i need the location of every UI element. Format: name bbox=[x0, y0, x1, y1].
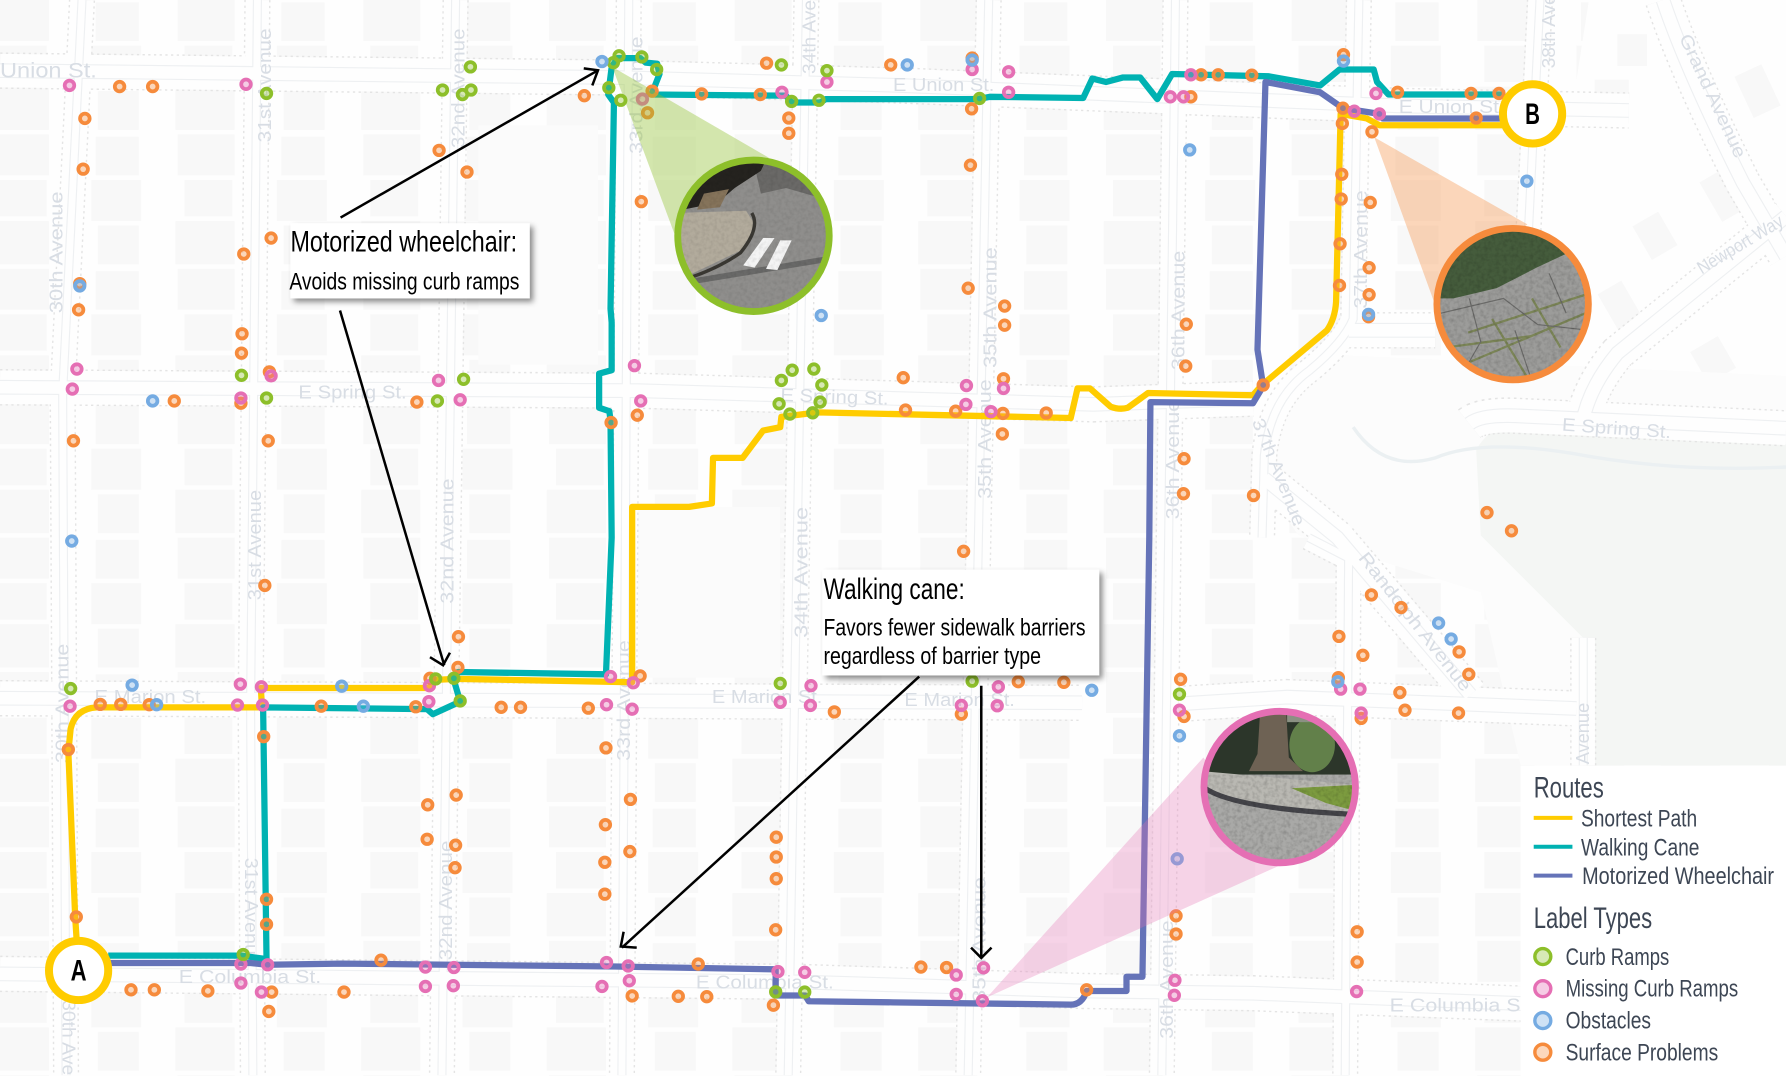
street labels: 34th Ave bbox=[800, 0, 820, 74]
street labels: 32nd Avenue bbox=[437, 478, 457, 604]
callout cone: missing curb ramp photo bbox=[987, 757, 1280, 997]
street labels: E Columbia St. bbox=[179, 967, 321, 987]
callout cone: surface problem photo bbox=[1374, 137, 1527, 302]
callout: walking cane bbox=[822, 570, 1099, 675]
route: motorized wheelchair bbox=[108, 82, 1502, 1005]
arrow: to curb-ramp detour bbox=[341, 68, 598, 218]
street labels: E Columbia S bbox=[1390, 995, 1521, 1015]
end marker B: B bbox=[1525, 98, 1540, 131]
route: walking cane bbox=[108, 58, 1502, 959]
street labels: E Spring St. bbox=[1561, 415, 1672, 442]
street labels: Randolph Avenue bbox=[1355, 548, 1476, 695]
street labels: E Spring St. bbox=[780, 385, 889, 409]
street labels: Grand Avenue bbox=[1675, 31, 1750, 161]
arrow: walking cane to 35th bbox=[971, 686, 992, 958]
legend item: curb ramps bbox=[1535, 944, 1669, 971]
street labels: E Marion St. bbox=[712, 687, 822, 707]
markers: surface problems bbox=[64, 50, 1516, 1016]
street labels: 32nd Avenue bbox=[449, 28, 469, 148]
markers: missing curb ramps bbox=[65, 65, 1384, 1006]
street labels: 31st Avenue bbox=[255, 28, 275, 142]
arrow: walking cane to 33rd bbox=[621, 677, 919, 948]
street labels: E Marion St. bbox=[95, 687, 206, 707]
street labels: 37th Avenue bbox=[1351, 190, 1371, 309]
legend heading: routes: Routes bbox=[1534, 771, 1604, 804]
street labels: 31st Avenue bbox=[241, 858, 261, 966]
street labels: 30th Ave bbox=[59, 1000, 79, 1075]
street labels: Avenue bbox=[1573, 703, 1593, 764]
legend item: missing curb ramps bbox=[1535, 976, 1738, 1003]
callout: walking cane: regardless of barrier type bbox=[824, 643, 1041, 670]
street labels: 33rd Avenue bbox=[614, 640, 634, 761]
callout: walking cane: Walking cane: bbox=[824, 573, 965, 606]
legend item: surface problems bbox=[1535, 1039, 1718, 1066]
legend heading: label types: Label Types bbox=[1534, 902, 1652, 935]
street labels: 34th Avenue bbox=[792, 507, 812, 638]
callout: walking cane: Favors fewer sidewalk barriers bbox=[824, 615, 1086, 642]
street labels: 30th Avenue bbox=[47, 191, 67, 313]
street labels: E Columbia St. bbox=[696, 973, 834, 993]
street labels: 32nd Avenue bbox=[436, 841, 456, 960]
street labels: 36th Avenue bbox=[1157, 920, 1177, 1039]
street labels: 36th Avenue bbox=[1169, 251, 1189, 370]
photo: curb ramp bbox=[672, 154, 837, 319]
legend item: obstacles: Obstacles bbox=[1566, 1008, 1651, 1035]
legend item: shortest path: Shortest Path bbox=[1581, 805, 1697, 832]
street labels: 35th Avenue bbox=[975, 379, 995, 499]
markers: obstacles bbox=[67, 55, 1532, 864]
start marker A bbox=[49, 941, 108, 1000]
arrow: to missing curb ramps on wheelchair route bbox=[340, 311, 450, 665]
legend panel bbox=[1521, 766, 1786, 1076]
route: shortest path bbox=[68, 114, 1502, 970]
street labels: 31st Avenue bbox=[245, 490, 265, 600]
legend item: missing curb ramps: Missing Curb Ramps bbox=[1566, 976, 1738, 1003]
callout cone: curb ramp photo bbox=[612, 67, 769, 234]
legend item: walking cane: Walking Cane bbox=[1581, 834, 1699, 861]
street labels: 35th Avenue bbox=[969, 877, 989, 1002]
street labels: E Union St bbox=[1399, 97, 1499, 117]
street labels: 35th Avenue bbox=[981, 247, 1001, 368]
street labels: E Marion St. bbox=[904, 690, 1015, 710]
legend item: surface problems: Surface Problems bbox=[1566, 1039, 1718, 1066]
street labels: 36th Avenue bbox=[1163, 400, 1183, 519]
callout: motorized wheelchair: Avoids missing curb ramps bbox=[289, 268, 519, 295]
street labels: 37th Avenue bbox=[1248, 415, 1309, 529]
street labels: Union St. bbox=[0, 57, 97, 82]
street labels: E Union St. bbox=[893, 75, 994, 95]
photo: surface problem bbox=[1433, 224, 1592, 384]
callout: motorized wheelchair: Motorized wheelchair: bbox=[290, 226, 517, 259]
photo: missing curb ramp bbox=[1202, 708, 1361, 871]
street labels: E Spring St. bbox=[298, 383, 407, 403]
end marker B bbox=[1503, 84, 1562, 144]
callout: motorized wheelchair bbox=[289, 223, 530, 298]
street labels: 30th Avenue bbox=[52, 644, 72, 763]
street labels: 33rd Avenue bbox=[626, 36, 646, 154]
legend item: obstacles bbox=[1535, 1008, 1651, 1035]
legend item: curb ramps: Curb Ramps bbox=[1566, 944, 1669, 971]
start marker A: A bbox=[71, 955, 87, 988]
markers: curb ramps bbox=[66, 51, 1184, 997]
